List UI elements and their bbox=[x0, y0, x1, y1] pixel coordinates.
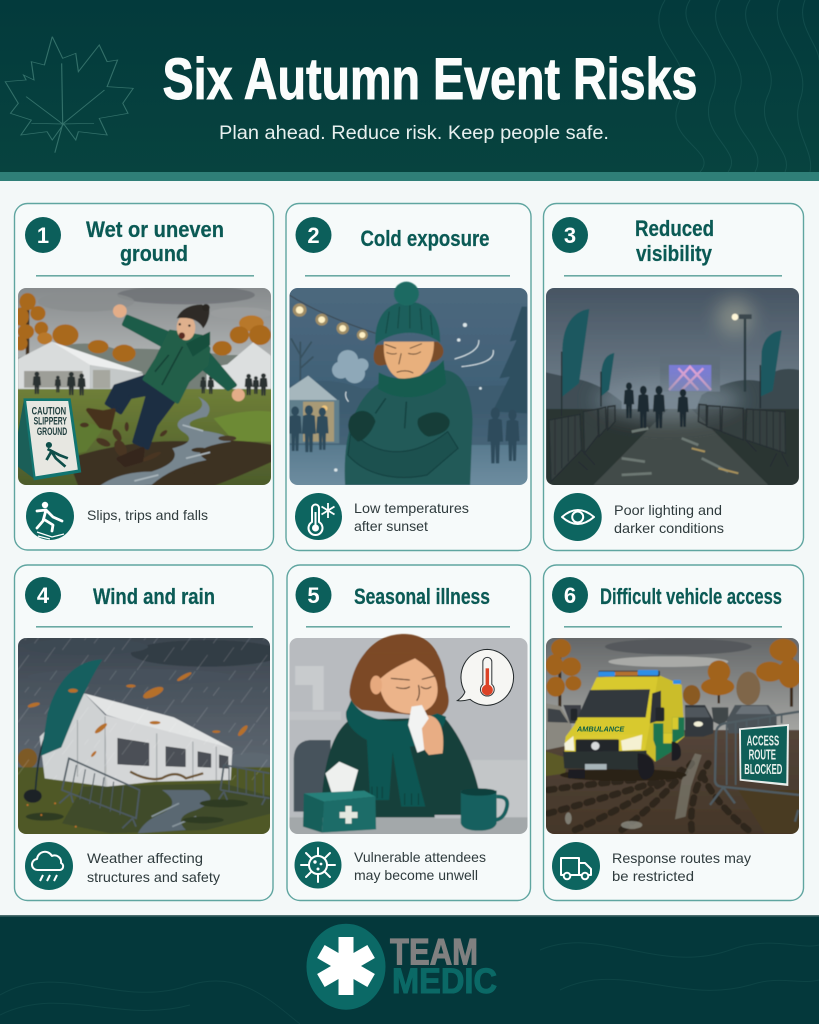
marquee bbox=[40, 693, 107, 787]
number badge 2 bbox=[296, 217, 332, 253]
number badge 6 bbox=[552, 577, 588, 613]
access route blocked sign: BLOCKED bbox=[744, 762, 782, 778]
subtitle: Plan ahead. Reduce risk. Keep people safe. bbox=[219, 123, 609, 144]
panel: wind and rain bbox=[14, 565, 282, 900]
people bbox=[624, 382, 689, 428]
number badge 2: 2 bbox=[307, 223, 320, 248]
panel: seasonal illness bbox=[286, 565, 530, 900]
body bbox=[321, 717, 479, 817]
caution sign bbox=[18, 398, 81, 480]
number badge 6: 6 bbox=[564, 583, 576, 608]
caption: after sunset bbox=[354, 518, 428, 534]
tent bbox=[289, 376, 339, 402]
breath bbox=[332, 350, 369, 383]
icon: vehicle bbox=[552, 842, 600, 890]
barriers bbox=[59, 758, 270, 828]
caption: be restricted bbox=[612, 868, 694, 884]
flags bbox=[562, 309, 782, 397]
icon: rain cloud bbox=[25, 842, 73, 890]
heading: Wet or uneven bbox=[86, 217, 224, 242]
caption bbox=[614, 502, 724, 536]
hat pompom rising above the image bbox=[394, 282, 419, 306]
caption bbox=[612, 850, 751, 884]
heading: ground bbox=[120, 241, 188, 266]
leaves bbox=[27, 671, 249, 758]
icon: slipping person bbox=[26, 492, 74, 540]
illustration: person slipping on muddy ground by a caution sign bbox=[14, 285, 279, 489]
logo: team medic: TEAM bbox=[390, 932, 478, 972]
caption: Low temperatures bbox=[354, 500, 469, 516]
caution sign: GROUND bbox=[37, 426, 67, 438]
tissue box bbox=[325, 762, 358, 795]
scarf bbox=[378, 360, 446, 397]
caption: Slips, trips and falls bbox=[87, 507, 208, 523]
caption: Response routes may bbox=[612, 850, 751, 866]
hair rising above the image bbox=[366, 634, 437, 653]
mud bbox=[542, 730, 805, 837]
barrier bbox=[710, 712, 799, 822]
wind bbox=[346, 340, 493, 402]
ground bbox=[14, 389, 279, 489]
caption: Poor lighting and bbox=[614, 502, 722, 518]
ambulance bbox=[560, 670, 687, 781]
caption: Weather affecting bbox=[87, 850, 203, 866]
panel: wet or uneven ground bbox=[14, 204, 279, 550]
heading: Wind and rain bbox=[93, 584, 215, 609]
logo asterisk bbox=[317, 937, 375, 995]
trees bbox=[546, 639, 802, 707]
trees bbox=[14, 293, 271, 362]
hat bbox=[375, 302, 440, 345]
hair back bbox=[349, 634, 449, 717]
caution sign: SLIPPERY bbox=[34, 415, 67, 427]
conifer bbox=[492, 307, 527, 413]
panel: difficult vehicle access bbox=[542, 565, 805, 900]
icon: virus bbox=[294, 842, 342, 888]
illustration: ambulance in mud with blocked route bbox=[542, 630, 805, 837]
illustration: storm battering a marquee bbox=[18, 638, 270, 834]
icon: maple leaf outline bbox=[5, 37, 133, 153]
tent right bbox=[207, 342, 271, 391]
speech bubble with thermometer bbox=[457, 649, 514, 705]
title: Six Autumn Event Risks bbox=[162, 47, 698, 112]
poles bbox=[743, 318, 747, 392]
illustration: unwell woman with tissue bbox=[286, 630, 530, 837]
mug bbox=[461, 791, 497, 831]
access route blocked sign: ROUTE bbox=[749, 748, 776, 764]
mud splash bbox=[80, 422, 168, 463]
marquee left bbox=[18, 342, 90, 390]
legs bbox=[107, 376, 156, 412]
caption: may become unwell bbox=[354, 867, 478, 883]
ambulance label: AMBULANCE bbox=[576, 724, 625, 733]
access route blocked sign: ACCESS bbox=[747, 733, 779, 749]
silhouettes bbox=[33, 372, 268, 396]
caption: Vulnerable attendees bbox=[354, 849, 486, 865]
number badge 3: 3 bbox=[564, 223, 576, 248]
panel: reduced visibility bbox=[542, 204, 805, 550]
number badge 5 bbox=[296, 577, 332, 613]
scarf bbox=[346, 700, 446, 807]
number badge 4 bbox=[25, 577, 61, 613]
face bbox=[384, 342, 434, 380]
heading bbox=[635, 216, 714, 266]
access route blocked sign bbox=[739, 724, 789, 786]
caption bbox=[354, 500, 469, 534]
footer banner bbox=[0, 915, 819, 1024]
number badge 3 bbox=[552, 217, 588, 253]
hair bbox=[374, 342, 443, 366]
panel: cold exposure bbox=[286, 204, 531, 550]
heading: Seasonal illness bbox=[354, 584, 490, 609]
illustration: foggy dark path to a stage bbox=[542, 285, 805, 488]
number badge 5: 5 bbox=[307, 583, 320, 608]
number badge 1 bbox=[25, 217, 61, 253]
string lights bbox=[289, 295, 375, 333]
heading bbox=[86, 217, 224, 266]
flag bbox=[34, 739, 44, 790]
cars bbox=[546, 703, 572, 750]
caption: darker conditions bbox=[614, 520, 724, 536]
heading: visibility bbox=[636, 241, 713, 266]
illustration: person shivering at an evening event bbox=[286, 285, 530, 488]
head bbox=[177, 315, 195, 340]
logo: team medic bbox=[306, 924, 497, 1010]
icon: thermometer and snowflake bbox=[295, 493, 342, 540]
jacket bbox=[124, 317, 169, 345]
number badge 4: 4 bbox=[37, 583, 50, 608]
header banner bbox=[0, 0, 819, 181]
caption bbox=[87, 850, 220, 885]
logo: team medic: MEDIC bbox=[392, 962, 497, 1001]
fences bbox=[549, 404, 786, 482]
caution sign: CAUTION bbox=[32, 405, 66, 417]
silhouettes bbox=[289, 405, 519, 463]
coat bbox=[345, 370, 473, 485]
icon: eye bbox=[554, 493, 602, 541]
face bbox=[379, 658, 438, 714]
heading: Reduced bbox=[635, 216, 714, 241]
caption bbox=[354, 849, 486, 883]
heading: Cold exposure bbox=[360, 226, 490, 251]
caption: structures and safety bbox=[87, 869, 220, 885]
number badge 1: 1 bbox=[37, 223, 49, 248]
tissue and hand bbox=[417, 715, 443, 755]
